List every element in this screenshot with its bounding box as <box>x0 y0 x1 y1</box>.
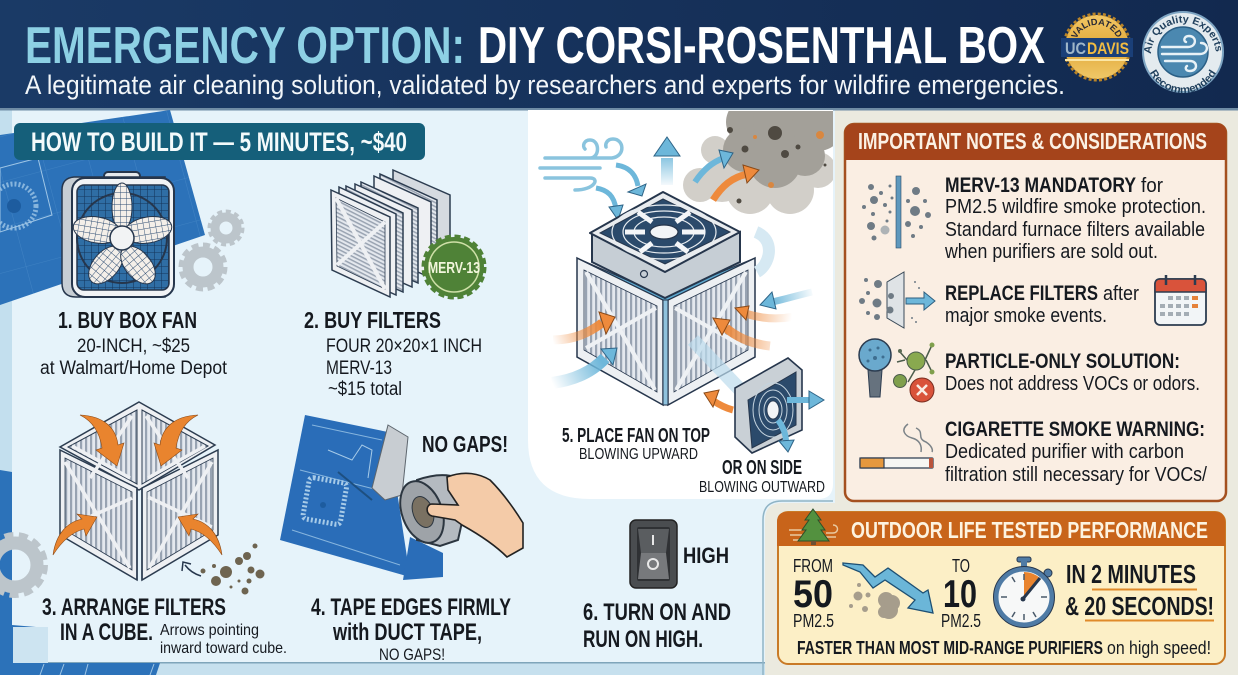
note 3 text <box>945 350 1200 395</box>
stat: to 10 PM2.5: PM2.5 <box>941 611 981 631</box>
step 3 text: 3. ARRANGE FILTERS <box>42 594 226 621</box>
blueprint background top-left <box>0 110 205 305</box>
step 4 text: NO GAPS! <box>379 645 445 664</box>
step 5 text: 5. PLACE FAN ON TOP <box>562 425 710 447</box>
step 5 text: BLOWING OUTWARD <box>699 479 825 496</box>
stat: to 10 PM2.5: 10 <box>943 573 977 616</box>
step 2 text <box>304 307 482 400</box>
title <box>25 17 1045 75</box>
note 2 text: major smoke events. <box>945 305 1107 327</box>
note 1 text: for <box>1141 175 1163 197</box>
step 2 text: 2. BUY FILTERS <box>304 307 441 333</box>
icon: stopwatch <box>994 557 1054 628</box>
notes heading <box>845 124 1226 160</box>
icon: power switch <box>630 520 677 588</box>
stat: in 2 minutes and 20 seconds <box>1065 559 1214 622</box>
step 3 text: Arrows pointing <box>160 622 259 639</box>
step 6 text: RUN ON HIGH. <box>583 626 703 653</box>
badge: MERV-13 <box>424 236 484 298</box>
note 1 text <box>944 174 1206 263</box>
arrows: pointing inward toward cube <box>53 415 222 555</box>
panel: fan placement <box>528 90 844 499</box>
step 6 text <box>583 599 731 653</box>
label: high: HIGH <box>683 543 729 568</box>
badge: UC Davis validated: VALIDATED <box>1070 18 1122 37</box>
note 1 text: Standard furnace filters available <box>945 219 1205 241</box>
title: DIY CORSI-ROSENTHAL BOX <box>478 17 1045 75</box>
step 4 text: 4. TAPE EDGES FIRMLY <box>311 594 511 621</box>
icon: gear bottom-left <box>0 535 45 595</box>
note 3 text: Does not address VOCs or odors. <box>945 373 1200 395</box>
step 1 text: 1. BUY BOX FAN <box>58 307 197 333</box>
icon: gears <box>181 212 242 289</box>
step 1 text <box>40 307 228 379</box>
badge: UC Davis validated <box>1061 12 1133 82</box>
performance footnote: on high speed! <box>1107 638 1211 658</box>
badge: air quality experts recommended <box>1142 11 1224 94</box>
icon: cigarette <box>860 424 933 468</box>
icon: stack of filters <box>331 170 450 297</box>
illustration: smoke cloud <box>683 111 833 214</box>
step 2 text: ~$15 total <box>328 379 402 400</box>
arrows: airflow <box>596 137 759 220</box>
performance heading <box>777 512 1225 546</box>
badge: air quality experts recommended: Recommended <box>1150 69 1216 94</box>
step 1 text: 20-INCH, ~$25 <box>77 336 190 357</box>
step 4 text <box>311 594 511 664</box>
illustration: taping with duct tape on blueprint <box>280 415 523 580</box>
illustration: filter cube with fan on top <box>577 192 755 405</box>
icon: dust particles <box>182 544 264 594</box>
note 1 text: MERV-13 MANDATORY <box>945 174 1136 197</box>
header band <box>0 0 1238 110</box>
stat: from 50 PM2.5 <box>793 556 834 631</box>
note 4 text <box>945 418 1207 486</box>
panel: important notes and considerations <box>845 124 1226 501</box>
icon: wind lines <box>540 139 622 190</box>
icon: particle only, molecules crossed out <box>859 339 934 402</box>
step 3 text: inward toward cube. <box>160 640 287 657</box>
step 1 text: at Walmart/Home Depot <box>40 358 228 379</box>
arrows: air drawn into filters <box>552 232 812 410</box>
icon: replace filter airflow <box>859 272 935 328</box>
note 3 text: PARTICLE-ONLY SOLUTION: <box>945 350 1180 373</box>
subtitle: A legitimate air cleaning solution, validated by researchers and experts for wildfire emergencies. <box>25 70 1065 100</box>
step 4 text: with DUCT TAPE, <box>332 619 482 646</box>
step 6 text: 6. TURN ON AND <box>583 599 731 626</box>
blueprint background bottom-left <box>0 470 160 675</box>
badge: air quality experts recommended: Air Quality Experts <box>1144 16 1222 54</box>
icon: dust cloud <box>849 583 900 619</box>
stat: to 10 PM2.5: TO <box>952 556 970 576</box>
performance footnote: FASTER THAN MOST MID-RANGE PURIFIERS <box>797 638 1103 658</box>
arrow: falling pollution <box>843 563 933 613</box>
badge: MERV-13: MERV-13 <box>428 260 480 277</box>
step 3 text <box>42 594 287 657</box>
icon: merv filter particles <box>862 176 931 248</box>
panel: outdoor life tested performance <box>777 509 1225 664</box>
badge: UC Davis validated: DAVIS <box>1087 39 1129 58</box>
note 1 text: when purifiers are sold out. <box>944 241 1158 263</box>
callout: no gaps: NO GAPS! <box>422 431 508 457</box>
step 5 text: OR ON SIDE <box>722 457 802 479</box>
stat: in 2 minutes and 20 seconds: IN 2 MINUTES <box>1066 559 1196 589</box>
note 4 text: filtration still necessary for VOCs/ <box>945 464 1207 486</box>
step 5 text <box>562 425 825 496</box>
icon: box fan <box>62 172 174 297</box>
stat: to 10 PM2.5 <box>941 556 981 631</box>
note 2 text: REPLACE FILTERS <box>945 282 1098 305</box>
note 2 text <box>945 282 1139 327</box>
stat: from 50 PM2.5: 50 <box>793 573 833 616</box>
step 2 text: MERV-13 <box>326 358 392 379</box>
note 2 text: after <box>1103 283 1139 305</box>
stat: from 50 PM2.5: FROM <box>793 556 833 576</box>
illustration: side-mounted fan <box>735 358 824 453</box>
section heading: HOW TO BUILD IT — 5 MINUTES, ~$40 <box>31 127 407 157</box>
icon: calendar <box>1155 275 1206 325</box>
note 1 text: PM2.5 wildfire smoke protection. <box>945 196 1206 218</box>
step 5 text: BLOWING UPWARD <box>579 446 698 463</box>
stat: from 50 PM2.5: PM2.5 <box>793 611 834 631</box>
note 4 text: Dedicated purifier with carbon <box>945 441 1184 463</box>
panel: how to build it <box>0 110 523 675</box>
icon: pine tree with wind <box>789 509 838 545</box>
step 2 text: FOUR 20×20×1 INCH <box>326 336 482 357</box>
title: EMERGENCY OPTION: <box>25 17 465 75</box>
step 3 text: IN A CUBE. <box>60 619 153 646</box>
illustration: filters in a cube <box>60 402 218 580</box>
section heading <box>14 123 425 160</box>
badge: UC Davis validated: UC <box>1065 39 1086 58</box>
